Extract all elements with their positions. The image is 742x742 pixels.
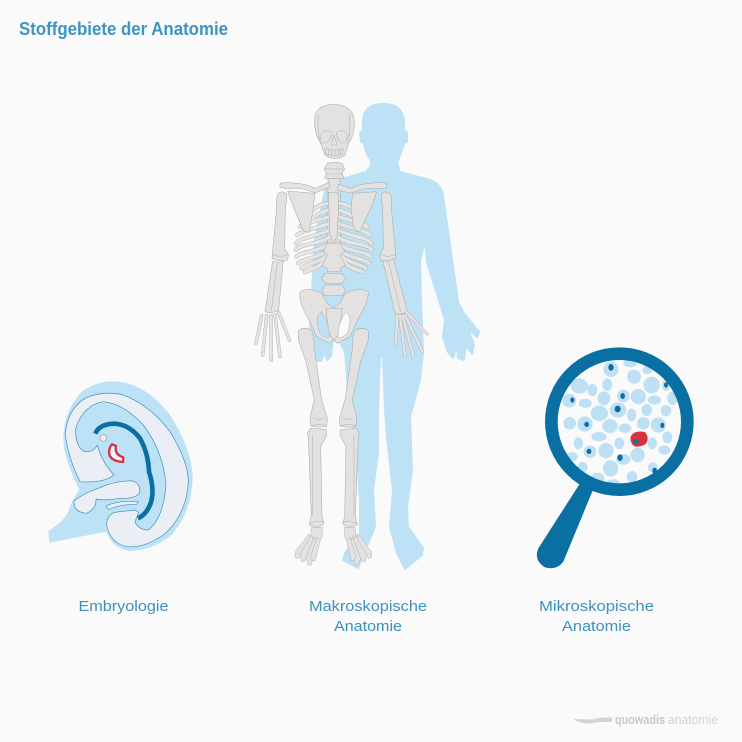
outer embryo shape [48, 381, 193, 551]
cell nuclei [570, 364, 668, 474]
left leg [295, 328, 327, 565]
yolk sac [74, 481, 140, 513]
logo: quowadis anatomie [574, 713, 718, 727]
logo: quowadis anatomie: anatomie [668, 713, 718, 727]
thoracic spine [327, 178, 341, 245]
title: Stoffgebiete der Anatomie [19, 19, 228, 39]
body silhouette [310, 104, 479, 569]
lens background [556, 358, 683, 485]
figure: magnifying glass with cells [537, 354, 687, 568]
amnion band [65, 393, 188, 547]
label: Makroskopische Anatomie: Makroskopische [309, 598, 427, 615]
skeleton lower limbs [295, 328, 372, 565]
scapula right [351, 192, 377, 232]
red heart tube [109, 444, 123, 462]
magnifier ring [551, 354, 687, 490]
label: Embryologie: Embryologie [78, 598, 168, 615]
logo: quowadis anatomie: quowadis [615, 713, 665, 727]
skeleton upper body [256, 104, 427, 360]
skull [314, 104, 354, 158]
label: Makroskopische Anatomie [309, 598, 427, 635]
left arm [256, 192, 289, 360]
neural tube [95, 424, 152, 518]
ribs [296, 203, 372, 272]
figure: human body silhouette with skeleton [256, 104, 479, 569]
spine [321, 162, 346, 296]
red cell [631, 431, 648, 447]
cells [562, 359, 678, 486]
scapula left [288, 191, 315, 232]
label: Mikroskopische Anatomie [539, 598, 654, 635]
figure: embryo [48, 381, 193, 551]
magnifier handle [537, 483, 593, 568]
sternum [329, 192, 339, 243]
small vesicle [100, 435, 107, 441]
pelvis [300, 290, 368, 343]
clavicles [280, 182, 387, 193]
right leg [339, 328, 372, 565]
label: Makroskopische Anatomie: Anatomie [334, 618, 402, 635]
hindgut [106, 501, 138, 509]
label: Mikroskopische Anatomie: Mikroskopische [539, 598, 654, 615]
right arm [379, 192, 427, 357]
icon: scalpel [574, 718, 612, 724]
label: Mikroskopische Anatomie: Anatomie [562, 618, 631, 635]
